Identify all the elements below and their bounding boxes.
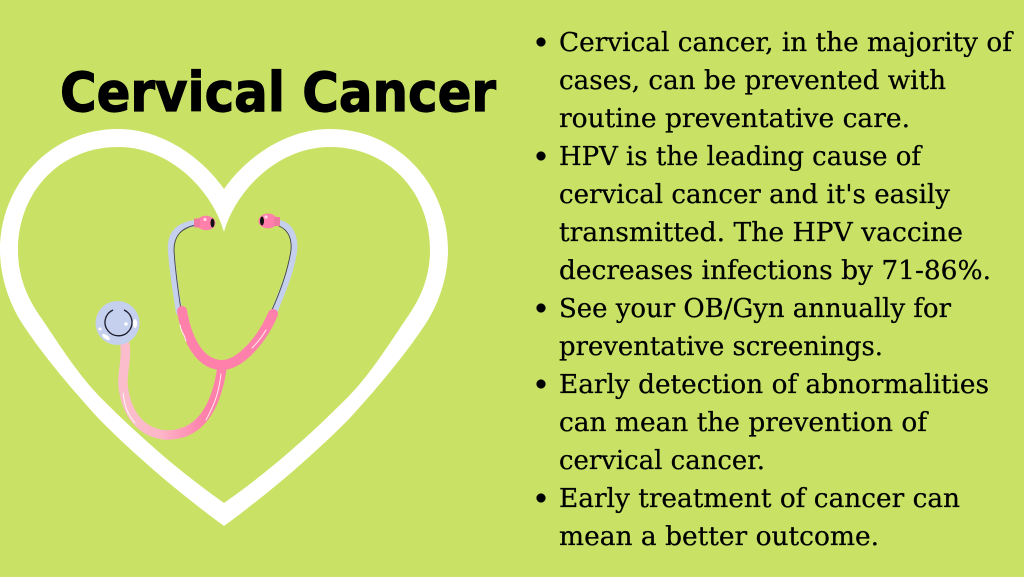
bullet 2: cervical cancer and it's easily	[559, 180, 950, 210]
bullet 2	[536, 142, 991, 286]
tube highlights	[123, 325, 266, 423]
bullet 1: Cervical cancer, in the majority of	[559, 28, 1014, 58]
bullet 4: cervical cancer.	[559, 446, 765, 476]
pink Y tube	[182, 311, 273, 365]
bullet 2: transmitted. The HPV vaccine	[559, 218, 963, 248]
bullet 3: See your OB/Gyn annually for	[559, 294, 952, 324]
bullet 5: mean a better outcome.	[559, 522, 879, 552]
bullet 2: HPV is the leading cause of	[559, 142, 923, 172]
right blue ear tube	[274, 223, 294, 312]
bullet 3: preventative screenings.	[559, 332, 883, 362]
bullet 1: routine preventative care.	[559, 104, 910, 134]
icon: left earpiece	[194, 216, 216, 230]
bullet 5	[536, 484, 960, 552]
bullet 4: Early detection of abnormalities	[559, 370, 989, 400]
title: Cervical Cancer	[60, 61, 496, 124]
icon: stethoscope	[123, 223, 294, 435]
bullet list	[536, 28, 1014, 552]
icon: chest piece	[96, 301, 140, 345]
bullet 4	[536, 370, 989, 476]
bullet 4: can mean the prevention of	[559, 408, 929, 438]
bullet 1	[536, 28, 1014, 134]
bullet 2: decreases infections by 71-86%.	[559, 256, 991, 286]
bullet 1: cases, can be prevented with	[559, 66, 946, 96]
icon: white heart outline	[0, 129, 448, 526]
lower tube	[123, 345, 222, 435]
bullet 3	[536, 294, 952, 362]
icon: right earpiece	[258, 214, 280, 228]
bullet 5: Early treatment of cancer can	[559, 484, 960, 514]
left blue ear tube	[171, 223, 197, 312]
